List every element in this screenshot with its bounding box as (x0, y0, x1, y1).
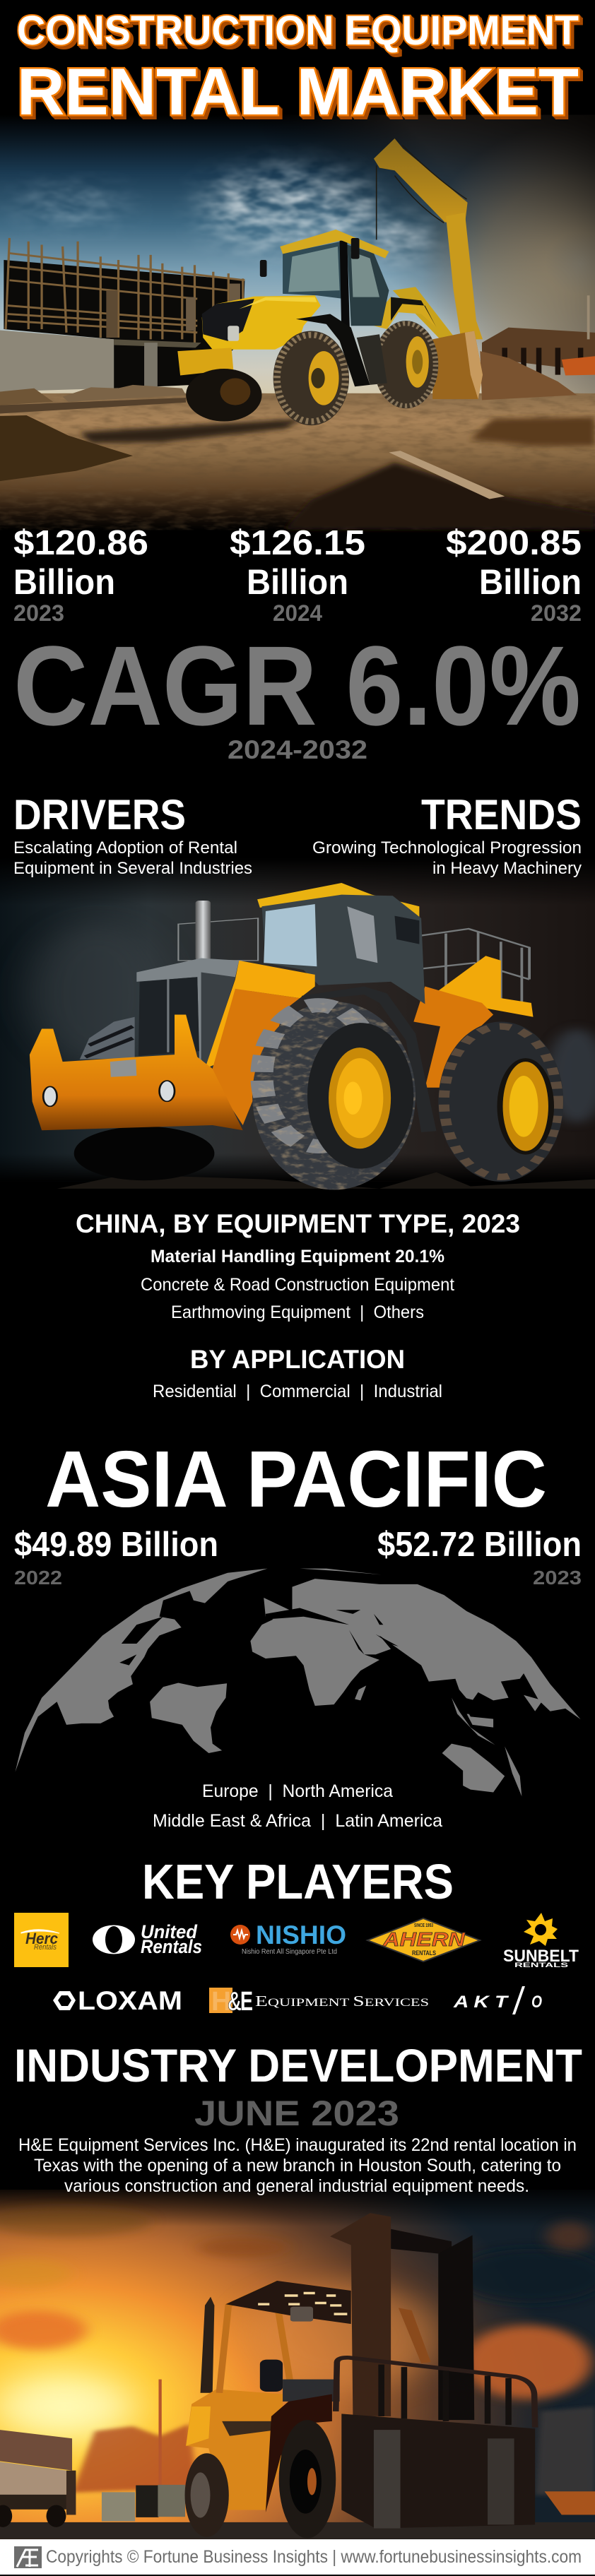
logo: Ahern Rentals (367, 1918, 480, 1961)
title line 1: CONSTRUCTION EQUIPMENT (17, 8, 579, 54)
stat 2032: 2032 (531, 600, 582, 626)
logo: Ahern Rentals: RENTALS (412, 1949, 436, 1957)
hero image: backhoe at construction site (0, 115, 595, 530)
sky (0, 115, 595, 405)
stat 2023 (13, 524, 148, 626)
stat 2024: 2024 (273, 600, 322, 626)
loader backdrop (0, 858, 595, 1215)
logo: Sunbelt Rentals: RENTALS (514, 1961, 568, 1969)
Americas north (15, 1569, 268, 1772)
logo: H&E Equipment Services: E (240, 1987, 253, 2017)
logo: Herc Rentals: Rentals (34, 1943, 57, 1952)
logo: Aktio (453, 1986, 542, 2014)
drivers block (13, 791, 252, 878)
world globe map (15, 1569, 581, 1796)
segmentation heading: CHINA, BY EQUIPMENT TYPE, 2023 (76, 1209, 520, 1238)
regional value 2022 (14, 1526, 218, 1589)
title line 2: RENTAL MARKET (17, 54, 579, 129)
logo: H&E Equipment Services: H (211, 1987, 231, 2017)
stat 2024 (230, 524, 365, 626)
development date: JUNE 2023 (194, 2094, 399, 2133)
application list: Residential | Commercial | Industrial (153, 1382, 442, 1401)
logo: Nishio: NISHIO (256, 1921, 346, 1949)
backhoe machine (177, 138, 483, 425)
drivers heading: DRIVERS (13, 791, 186, 838)
logo: H&E Equipment Services: & (228, 1987, 242, 2017)
key players heading: KEY PLAYERS (142, 1854, 454, 1909)
logo: H&E Equipment Services: E QUIPMENT S ERVICES (255, 1993, 429, 2010)
stat 2024: $126.15 (230, 524, 365, 562)
development description: various construction and general industrial equipment needs. (64, 2176, 529, 2196)
trends heading: TRENDS (421, 791, 582, 838)
drivers text: Escalating Adoption of Rental (13, 838, 237, 857)
Asia Pacific heading: ASIA PACIFIC (45, 1435, 547, 1524)
distant site and ground (0, 295, 595, 530)
other regions list: Middle East & Africa | Latin America (153, 1811, 442, 1831)
development description: Texas with the opening of a new branch in Houston South, catering to (34, 2156, 561, 2176)
drivers text (13, 838, 252, 878)
yard background (0, 2380, 595, 2539)
segment list: Earthmoving Equipment | Others (171, 1302, 424, 1322)
regional value 2023 (377, 1526, 582, 1589)
drivers text: Equipment in Several Industries (13, 859, 252, 878)
segmentation by equipment type (76, 1209, 520, 1322)
CAGR period: 2024-2032 (228, 735, 367, 764)
trends text: in Heavy Machinery (432, 859, 582, 878)
development description: H&E Equipment Services Inc. (H&E) inaugurated its 22nd rental location in (18, 2135, 577, 2155)
stat 2024: Billion (247, 562, 348, 602)
Southeast Asia islands (452, 1695, 543, 1796)
main title (17, 8, 579, 129)
logo: United Rentals: United (141, 1921, 197, 1942)
regional value 2022: $49.89 Billion (14, 1526, 218, 1564)
segmentation by application (153, 1345, 442, 1401)
stat 2032: $200.85 (446, 524, 582, 562)
trends text (312, 838, 582, 878)
building under construction (0, 238, 245, 391)
logo: Aktio: O (531, 1993, 542, 2012)
leading segment: Material Handling Equipment 20.1% (151, 1247, 444, 1266)
logo: Aktio: A K T (453, 1993, 509, 2012)
logo: United Rentals (93, 1921, 202, 1957)
South America (150, 1683, 227, 1753)
segment list (141, 1275, 454, 1322)
trends block (312, 791, 582, 878)
other regions list: Europe | North America (202, 1781, 393, 1801)
stat 2023: Billion (13, 562, 115, 602)
logo: Ahern Rentals: SINCE 1953 (414, 1923, 433, 1928)
Inland seas and lakes (108, 1608, 501, 1719)
logo: Sunbelt Rentals (503, 1913, 579, 1969)
stat 2032 (446, 524, 582, 626)
logo: Nishio: Nishio Rent All Singapore Pte Ltd (242, 1948, 337, 1956)
regional value 2022: 2022 (14, 1567, 62, 1589)
forklift machine (185, 2213, 535, 2539)
stat 2032: Billion (479, 562, 582, 602)
logo: Nishio (230, 1921, 346, 1956)
Madagascar (355, 1685, 366, 1700)
stat 2023: $120.86 (13, 524, 148, 562)
segment list: Concrete & Road Construction Equipment (141, 1275, 454, 1295)
logo: Herc Rentals (14, 1913, 69, 1967)
loader image (0, 858, 595, 1215)
footer band (0, 2539, 595, 2575)
other regions list (153, 1781, 442, 1831)
footer logo (14, 2546, 42, 2568)
logo: United Rentals: Rentals (141, 1936, 202, 1957)
stat 2023: 2023 (13, 600, 64, 626)
Africa and Eurasia (250, 1579, 581, 1719)
Greenland top sliver (300, 1569, 382, 1574)
logo: Loxam: LOXAM (78, 1986, 182, 2015)
logo: H&E Equipment Services (209, 1987, 429, 2017)
logo: Sunbelt Rentals: SUNBELT (503, 1947, 579, 1966)
forklift image (0, 2185, 595, 2539)
development description (18, 2135, 577, 2196)
regional value 2023: 2023 (533, 1567, 582, 1589)
regional value 2023: $52.72 Billion (377, 1526, 582, 1564)
loader machine (30, 883, 563, 1190)
Australia (442, 1744, 505, 1793)
logo: Ahern Rentals: AHERN (382, 1928, 466, 1950)
trends text: Growing Technological Progression (312, 838, 582, 857)
application heading: BY APPLICATION (190, 1345, 405, 1374)
sunset sky (0, 2185, 595, 2539)
logo: Herc Rentals: Herc (25, 1930, 58, 1947)
